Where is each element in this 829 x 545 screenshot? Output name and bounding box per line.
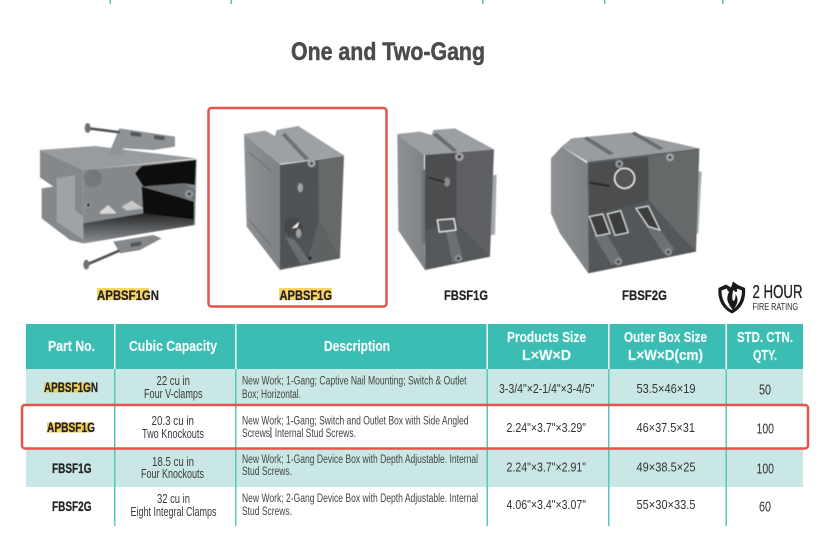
table header: Part No. <box>48 339 95 355</box>
product: FBSF1G box <box>397 128 497 270</box>
row: APBSF1G: New Work; 1-Gang; Switch and Outlet Box with Side Angled <box>242 416 468 428</box>
row: APBSF1G: 20.3 cu in <box>152 413 194 428</box>
red highlight box: product APBSF1G <box>208 108 386 306</box>
row: FBSF1G <box>52 454 774 481</box>
row: FBSF1G: Four Knockouts <box>141 466 204 481</box>
row: APBSF1GN: 3-3/4"×2-1/4"×3-4/5" <box>499 382 594 396</box>
product labels: APBSF1G <box>280 288 332 303</box>
product: FBSF2G box <box>551 132 702 273</box>
row: FBSF1G: FBSF1G <box>52 461 92 476</box>
row: FBSF2G: Stud Screws. <box>242 506 292 518</box>
row: APBSF1G: Two Knockouts <box>142 426 204 441</box>
table header: L×W×D(cm) <box>628 348 703 364</box>
row: FBSF2G: FBSF2G <box>52 499 92 514</box>
table header: STD. CTN. <box>737 330 793 346</box>
row: APBSF1GN: Box; Horizontal. <box>242 389 301 401</box>
product labels: FBSF1G <box>444 288 488 303</box>
table header: QTY. <box>753 348 777 364</box>
product: APBSF1GN box <box>40 123 197 270</box>
row: APBSF1GN: Four V-clamps <box>144 386 203 401</box>
row: APBSF1GN: 22 cu in <box>156 373 190 388</box>
table header: Outer Box Size <box>624 330 707 346</box>
row: FBSF2G: 55×30×33.5 <box>636 498 696 512</box>
row: FBSF2G: 60 <box>759 498 771 516</box>
title: One and Two-Gang <box>291 38 485 66</box>
row: APBSF1G: APBSF1G <box>47 420 95 435</box>
row: FBSF2G: New Work; 2-Gang Device Box with Depth Adjustable. Internal <box>242 493 478 505</box>
row: FBSF1G: 18.5 cu in <box>152 454 194 469</box>
table header: Products Size <box>507 330 586 346</box>
table header: L×W×D <box>522 348 571 364</box>
row: FBSF1G: 100 <box>756 460 774 478</box>
row: FBSF2G <box>52 491 771 519</box>
row: APBSF1GN: 50 <box>759 382 771 398</box>
row: APBSF1G: 2.24"×3.7"×3.29" <box>506 421 586 435</box>
row: APBSF1G: 100 <box>756 420 774 438</box>
row: FBSF2G: Eight Integral Clamps <box>130 504 217 519</box>
table header <box>26 324 803 369</box>
row: APBSF1GN: New Work; 1-Gang; Captive Nail Mounting; Switch & Outlet <box>242 376 467 388</box>
fire rating text <box>752 282 802 313</box>
fire rating text: FIRE RATING <box>752 301 798 313</box>
product labels <box>97 288 667 303</box>
row: FBSF2G: 4.06"×3.4"×3.07" <box>506 498 586 512</box>
row: FBSF2G: 32 cu in <box>157 491 190 506</box>
product: APBSF1G box <box>244 126 345 270</box>
row: APBSF1GN: 53.5×46×19 <box>636 382 696 396</box>
table <box>26 324 803 526</box>
row: FBSF1G: New Work; 1-Gang Device Box with Depth Adjustable. Internal <box>242 454 478 466</box>
row: APBSF1G <box>47 413 774 441</box>
product labels: APBSF1GN <box>97 288 159 303</box>
product labels: FBSF2G <box>622 288 667 303</box>
row: APBSF1G: 46×37.5×31 <box>636 421 695 435</box>
row: APBSF1GN <box>44 373 771 401</box>
icon: fire rating shield <box>718 282 745 314</box>
row: FBSF1G: 49×38.5×25 <box>636 460 696 474</box>
row: APBSF1GN: APBSF1GN <box>44 380 98 395</box>
row: FBSF1G: 2.24"×3.7"×2.91" <box>506 460 586 474</box>
table header: Description <box>324 339 390 355</box>
row: APBSF1G: Screws. Internal Stud Screws. <box>242 428 356 440</box>
fire rating text: 2 HOUR <box>752 282 802 302</box>
red highlight box: table row APBSF1G <box>22 405 808 448</box>
table header: Cubic Capacity <box>129 339 217 355</box>
row: FBSF1G: Stud Screws. <box>242 466 292 478</box>
